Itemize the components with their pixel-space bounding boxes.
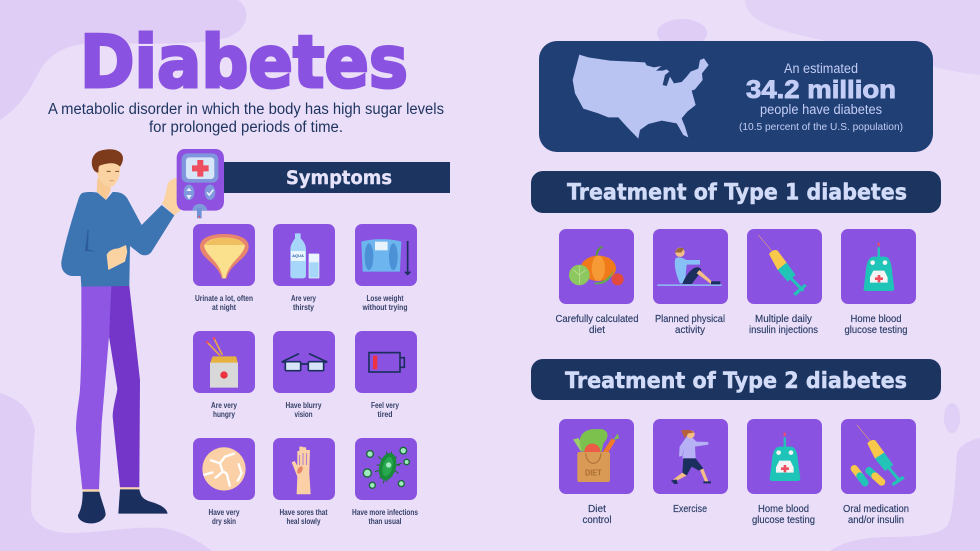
oral medication: and/or insulin <box>848 514 904 526</box>
neck <box>97 178 111 200</box>
oral medication <box>841 419 916 526</box>
symptom: urinate: at night <box>212 303 236 312</box>
symptoms grid <box>193 224 418 526</box>
symptom: thirsty: Are very <box>291 294 316 303</box>
symptoms heading <box>224 162 450 193</box>
diet control <box>559 419 634 526</box>
home glucose test <box>841 229 916 336</box>
glucose meter <box>177 149 224 218</box>
symptom: infections: than usual <box>368 517 402 526</box>
home glucose test: glucose testing <box>752 514 815 526</box>
head <box>92 149 123 187</box>
exercise <box>653 419 728 515</box>
diet control: control <box>582 514 612 526</box>
title: Diabetes <box>80 20 408 104</box>
diet control: DIET <box>585 468 602 477</box>
physical activity <box>653 229 728 336</box>
statistic text: (10.5 percent of the U.S. population) <box>739 121 903 133</box>
subtitle: A metabolic disorder in which the body has high sugar levels <box>48 101 444 118</box>
home glucose test: Home blood <box>850 313 902 325</box>
sweater <box>61 192 174 287</box>
statistic text <box>739 61 903 133</box>
home glucose test <box>747 419 822 526</box>
symptom: urinate <box>193 224 255 312</box>
symptom: dry skin: Have very <box>208 508 240 517</box>
symptom: lose weight: without trying <box>362 303 408 312</box>
symptom: blurry vision: Have blurry <box>286 401 322 410</box>
symptoms heading: Symptoms <box>286 167 392 189</box>
heading: treatment of type 2 <box>531 359 941 400</box>
statistic text: people have diabetes <box>760 102 882 117</box>
exercise: Exercise <box>673 503 707 515</box>
diet: Carefully calculated <box>556 313 639 325</box>
symptom: blurry vision <box>273 331 335 419</box>
symptom: urinate: Urinate a lot, often <box>195 294 253 303</box>
symptom: infections: Have more infections <box>352 508 418 517</box>
statistic text: 34.2 million <box>746 76 896 104</box>
heading: treatment of type 2: Treatment of Type 2 diabetes <box>565 369 907 394</box>
subtitle <box>48 101 444 136</box>
symptom: slow healing sores <box>273 438 335 526</box>
oral medication: Oral medication <box>843 503 909 515</box>
symptom: thirsty: AQUA <box>292 253 304 258</box>
symptom: dry skin: dry skin <box>212 517 236 526</box>
symptom: lose weight: Lose weight <box>366 294 404 303</box>
insulin injections: Multiple daily <box>755 313 813 325</box>
panel: type 2 treatments <box>559 419 916 526</box>
symptom: tired: tired <box>378 410 393 419</box>
illustration: man holding glucose meter <box>61 149 224 523</box>
diet: diet <box>589 324 605 336</box>
symptom: slow healing sores: Have sores that <box>280 508 328 517</box>
symptom: thirsty <box>273 224 335 312</box>
symptom: slow healing sores: heal slowly <box>286 517 321 526</box>
symptom: hungry <box>193 331 255 419</box>
panel: US statistics <box>539 41 933 152</box>
trousers <box>76 286 140 489</box>
panel: type 1 treatments <box>556 229 916 336</box>
diet control: Diet <box>588 503 606 515</box>
socks <box>83 487 139 492</box>
home glucose test: Home blood <box>758 503 809 515</box>
symptom: tired <box>355 331 417 419</box>
symptom: infections <box>352 438 418 526</box>
physical activity: activity <box>675 324 706 336</box>
symptom: dry skin <box>193 438 255 526</box>
symptom: thirsty: thirsty <box>293 303 314 312</box>
symptom: tired: Feel very <box>371 401 399 410</box>
home glucose test: glucose testing <box>844 324 908 336</box>
physical activity: Planned physical <box>655 313 725 325</box>
heading: treatment of type 1 <box>531 171 941 213</box>
statistic text: An estimated <box>784 61 858 76</box>
holding hand <box>162 178 183 215</box>
shoes <box>78 489 168 523</box>
icon: US map <box>573 55 709 139</box>
heading: treatment of type 1: Treatment of Type 1 diabetes <box>567 180 907 206</box>
symptom: hungry: hungry <box>213 410 235 419</box>
hand on belly <box>107 245 127 270</box>
insulin injections: insulin injections <box>749 324 818 336</box>
symptom: hungry: Are very <box>211 401 237 410</box>
symptom: lose weight <box>355 224 417 312</box>
symptom: blurry vision: vision <box>294 410 313 419</box>
subtitle: for prolonged periods of time. <box>149 119 343 136</box>
diet <box>556 229 639 336</box>
insulin injections <box>747 229 822 336</box>
